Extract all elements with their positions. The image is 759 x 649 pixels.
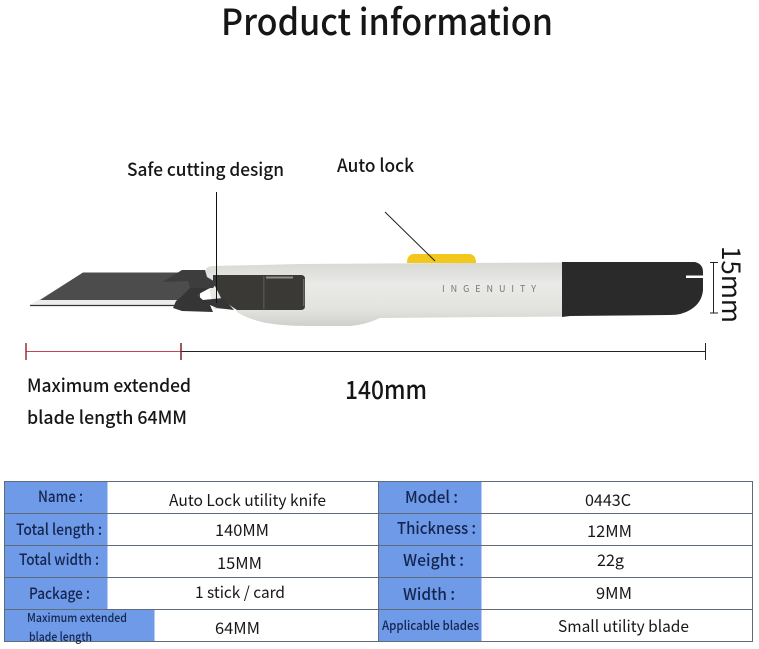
row: total length [16, 517, 269, 541]
row: maximum extended blade length: 64MM [215, 615, 260, 639]
dimension: blade length [26, 343, 181, 360]
dimension label: 15mm: 15mm [714, 246, 751, 323]
blade holder lower [173, 288, 234, 312]
callout: auto lock: Auto lock [337, 152, 415, 178]
row: model: 0443C [585, 487, 631, 511]
pointer line: auto lock [385, 212, 435, 261]
row: name [38, 485, 326, 511]
label: maximum extended blade length [27, 372, 191, 430]
table background [4, 482, 752, 642]
row: total length: 140MM [215, 517, 269, 541]
row: total length: Total length : [16, 518, 102, 540]
label: 140mm: 140mm [345, 371, 427, 407]
grip slot [686, 276, 703, 278]
dimension: total length [181, 343, 706, 360]
row: model [405, 484, 631, 511]
row: applicable blades: Applicable blades [382, 615, 479, 634]
row: name: Auto Lock utility knife [169, 487, 326, 511]
specification table [4, 481, 753, 645]
row: thickness [397, 515, 632, 542]
blade holder upper [163, 270, 217, 288]
row: maximum extended blade length [27, 609, 260, 645]
row: thickness: 12MM [587, 518, 632, 542]
row: width: 9MM [596, 580, 632, 604]
yellow lock slider [407, 254, 476, 263]
row: weight [403, 547, 624, 571]
row: thickness: Thickness : [397, 515, 476, 539]
knife illustration [30, 254, 703, 326]
knife body [205, 262, 562, 326]
pointer line: safe cutting [216, 192, 218, 303]
row: total width: Total width : [19, 548, 99, 570]
row: maximum extended blade length: Maximum extended [27, 609, 127, 626]
callout: safe cutting design: Safe cutting design [127, 156, 284, 182]
row: weight: Weight : [403, 547, 464, 571]
dimension: width bracket [710, 262, 718, 313]
row: maximum extended blade length: blade length [29, 628, 92, 645]
row: package: 1 stick / card [195, 579, 285, 603]
label: maximum extended blade length: Maximum extended [27, 372, 191, 398]
row: width: Width : [403, 581, 455, 605]
row: package [29, 579, 285, 604]
blue label cells [4, 482, 482, 642]
black grip [562, 262, 703, 317]
row: weight: 22g [597, 547, 624, 571]
body window [213, 275, 305, 310]
row: package: Package : [29, 582, 90, 604]
table grid [4, 481, 753, 642]
row: total width: 15MM [217, 550, 262, 574]
row: model: Model : [405, 484, 458, 508]
row: width [403, 580, 632, 605]
row: name: Name : [38, 485, 83, 507]
row: applicable blades: Small utility blade [558, 613, 689, 637]
label: maximum extended blade length: blade length 64MM [27, 404, 187, 430]
brand logo: INGENUITY [442, 282, 536, 295]
row: total width [19, 548, 262, 574]
blade [30, 272, 200, 306]
row: applicable blades [382, 613, 689, 637]
